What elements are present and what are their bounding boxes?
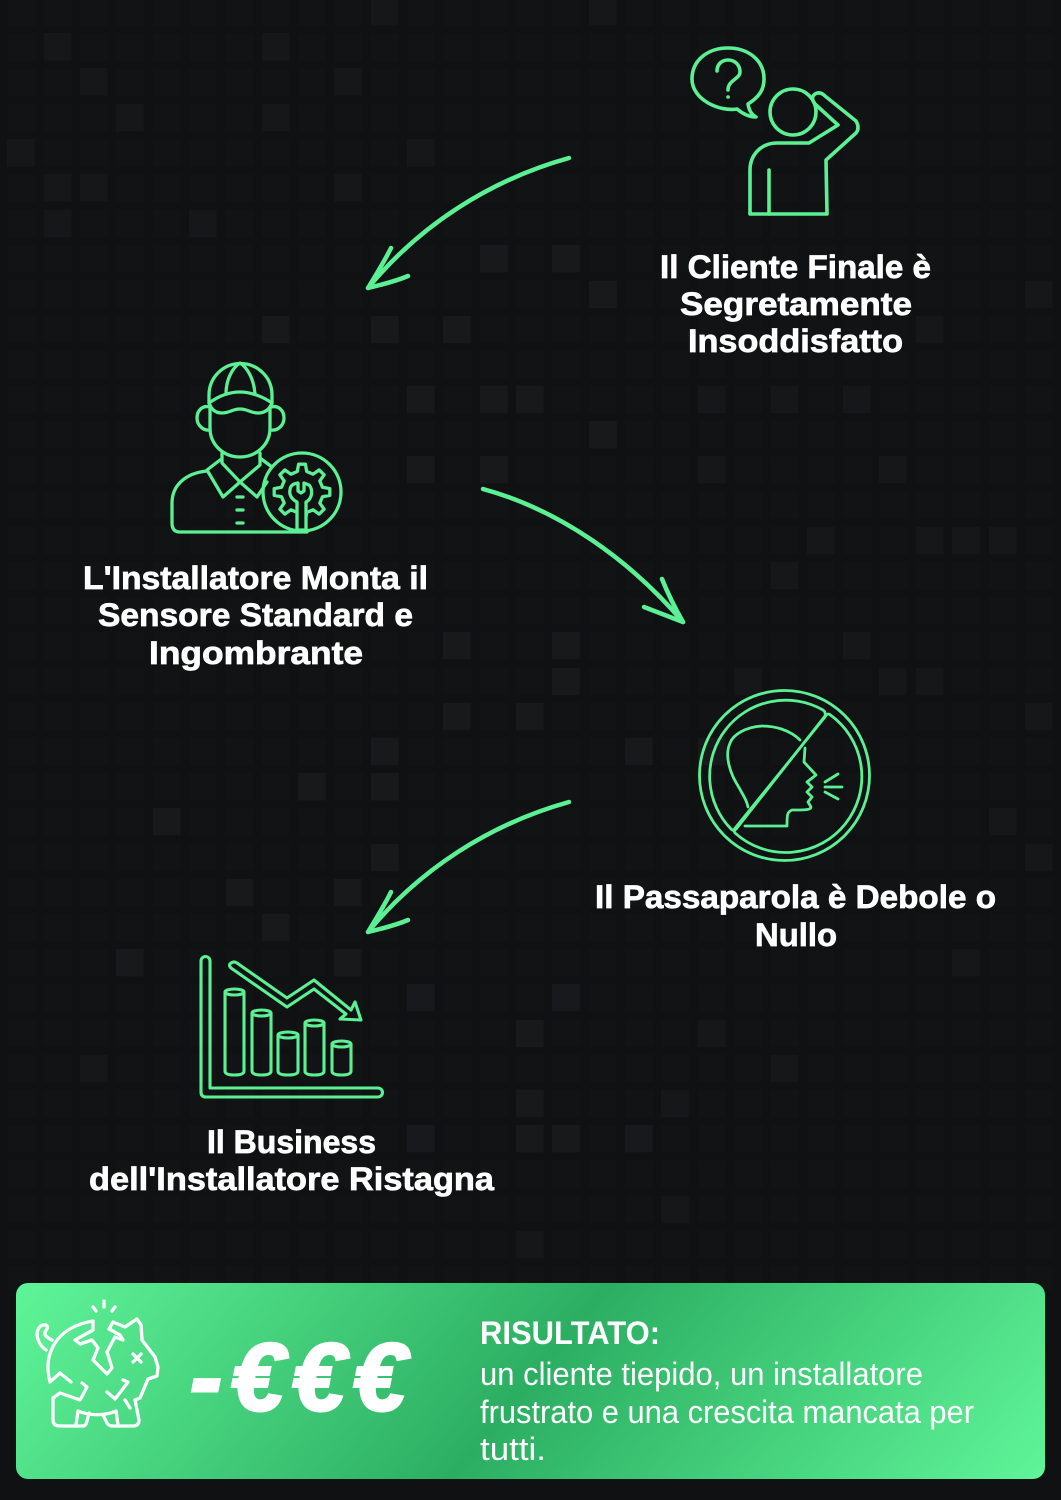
icon: broken piggy bank: [37, 1301, 158, 1426]
heading: installer: Ingombrante: [149, 635, 363, 671]
heading: installer: [83, 560, 428, 671]
heading: customer: Il Cliente Finale è: [660, 249, 931, 285]
icon: confused customer: [692, 48, 858, 214]
heading: customer: Insoddisfatto: [688, 323, 903, 359]
heading: business: [89, 1124, 494, 1197]
arrow: installer to word of mouth: [483, 489, 683, 622]
big number: minus euros: -€€€: [190, 1324, 410, 1431]
icon: declining bar chart: [201, 956, 382, 1097]
icon: installer with gear: [172, 363, 341, 532]
result text: frustrato e una crescita mancata per: [480, 1394, 974, 1430]
result text: tutti.: [480, 1431, 546, 1467]
heading: word of mouth: Il Passaparola è Debole o: [595, 879, 996, 915]
result text: RISULTATO:: [480, 1315, 660, 1351]
heading: word of mouth: Nullo: [755, 917, 837, 953]
icon: no speaking sign: [700, 690, 870, 860]
heading: customer: [660, 249, 931, 359]
arrow: word of mouth to business: [368, 802, 569, 932]
heading: customer: Segretamente: [680, 286, 912, 322]
arrow: customer to installer: [368, 158, 569, 288]
heading: business: dell'Installatore Ristagna: [89, 1161, 494, 1197]
heading: installer: Sensore Standard e: [98, 597, 413, 633]
panel: result banner: [16, 1283, 1045, 1479]
heading: word of mouth: [595, 879, 996, 953]
heading: business: Il Business: [207, 1124, 376, 1160]
result text: [480, 1315, 974, 1467]
heading: installer: L'Installatore Monta il: [83, 560, 428, 596]
result text: un cliente tiepido, un installatore: [480, 1356, 923, 1392]
